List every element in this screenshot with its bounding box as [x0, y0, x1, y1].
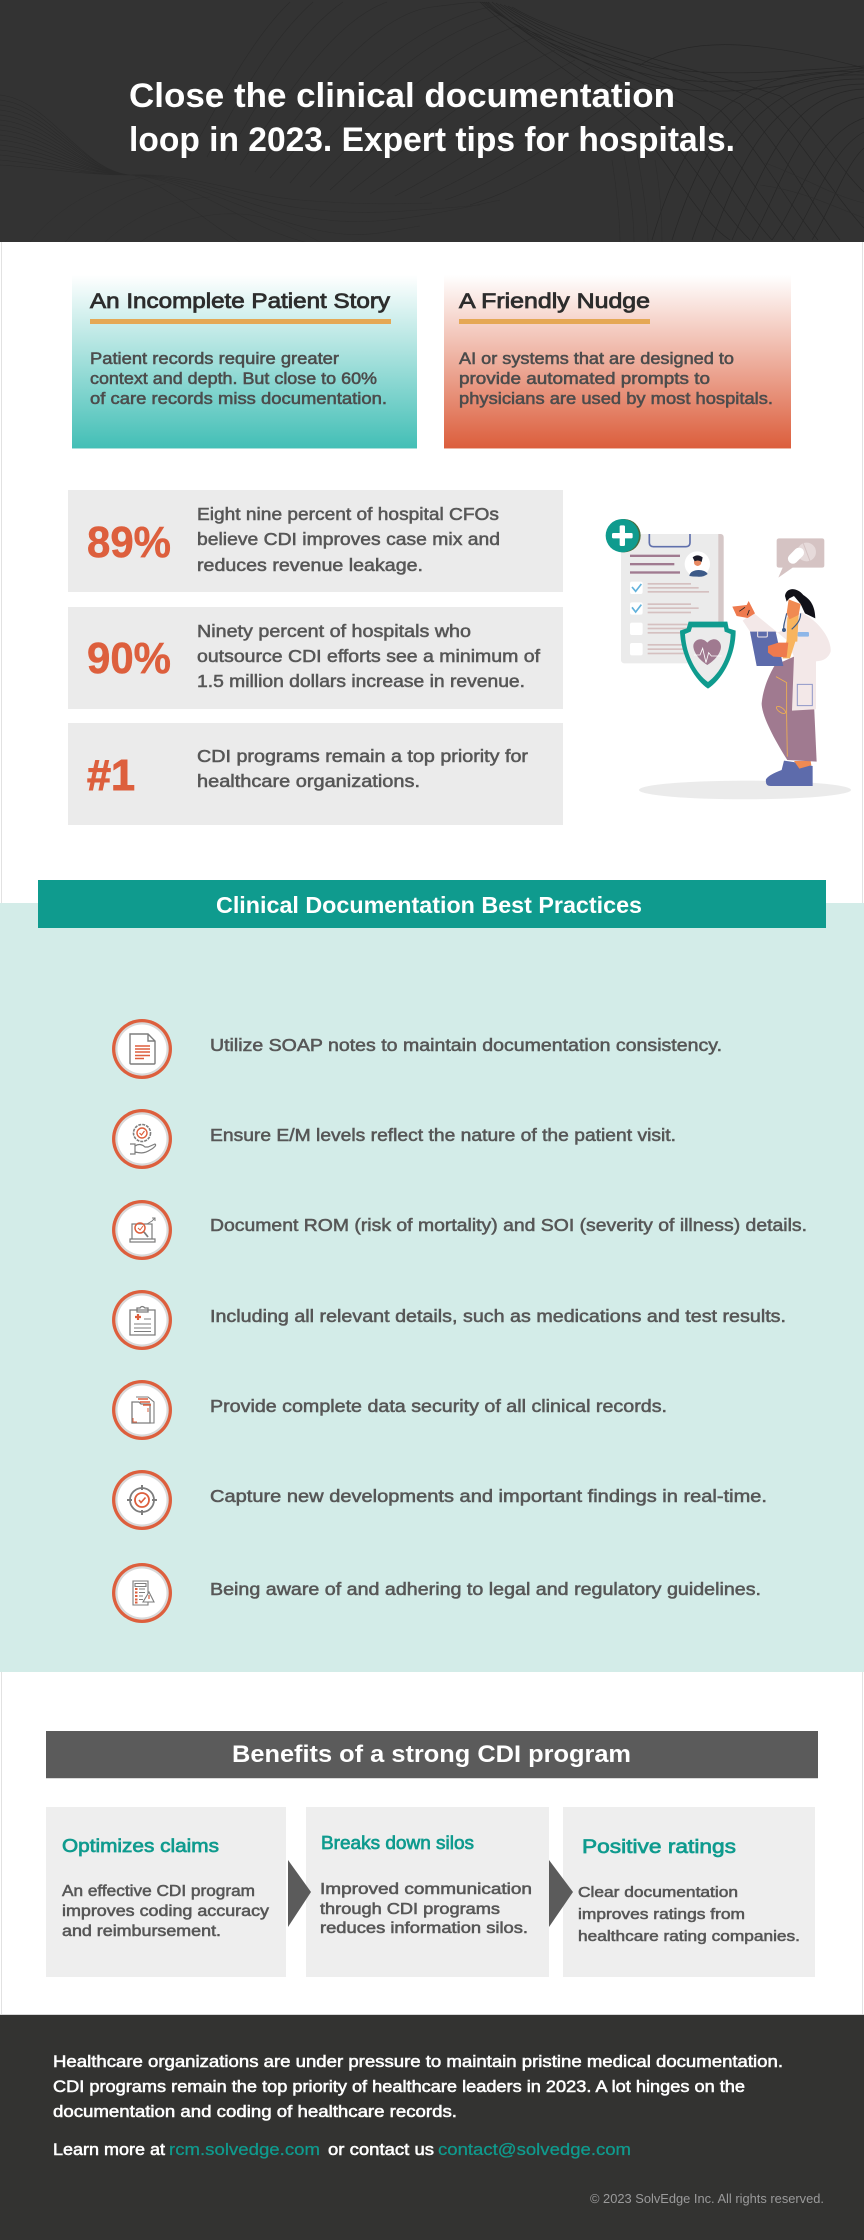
text: reduces information silos.	[320, 1920, 528, 1937]
stat text: healthcare organizations.	[197, 771, 420, 791]
footer paragraph: documentation and coding of healthcare records.	[53, 2103, 457, 2121]
heading: Breaks down silos	[321, 1832, 474, 1853]
stat text: 1.5 million dollars increase in revenue.	[197, 671, 525, 691]
figure: doctor	[732, 589, 831, 786]
hands	[768, 643, 788, 657]
text: Improved communication	[320, 1881, 532, 1898]
shoes	[766, 761, 813, 786]
icon: hand with badge	[112, 1109, 172, 1169]
practice 7: legal guidelines	[112, 1563, 761, 1623]
panel: an incomplete patient story	[72, 275, 417, 449]
title: loop in 2023. Expert tips for hospitals.	[129, 121, 735, 159]
icon: heart shield	[680, 622, 736, 689]
heading bar: benefits of a strong cdi program	[46, 1731, 818, 1779]
illustration: doctor with clipboard and shield	[606, 519, 851, 799]
contact line: rcm.solvedge.com	[169, 2140, 320, 2159]
stat card: #1	[68, 723, 563, 825]
text: patient records: of care records miss documentation.	[90, 390, 387, 408]
contact line	[53, 2140, 631, 2159]
heading bar: clinical documentation best practices: Clinical Documentation Best Practices	[216, 892, 642, 918]
contact line: Learn more at	[53, 2140, 165, 2159]
text: Clear documentation	[578, 1885, 738, 1901]
stethoscope	[784, 613, 801, 631]
text: improves coding accuracy	[62, 1903, 269, 1920]
benefit card: breaks down silos	[306, 1807, 549, 1977]
benefit card: positive ratings	[563, 1807, 815, 1977]
heading: an incomplete patient story: An Incomplete Patient Story	[90, 289, 390, 313]
stat text: Eight nine percent of hospital CFOs	[197, 504, 499, 524]
stat text: reduces revenue leakage.	[197, 555, 423, 575]
text: ai or systems: AI or systems that are designed to	[459, 350, 734, 368]
text: Utilize SOAP notes to maintain documentation consistency.	[210, 1035, 722, 1055]
practice 2: e/m levels	[112, 1109, 676, 1169]
icon: plus badge	[606, 519, 641, 552]
stat number 89%: 89%	[87, 518, 171, 567]
heading bar: clinical documentation best practices	[38, 880, 826, 928]
text: Ensure E/M levels reflect the nature of the patient visit.	[210, 1125, 676, 1145]
stat number #1: #1	[87, 751, 135, 800]
text: and reimbursement.	[62, 1923, 221, 1940]
stat card: 90%	[68, 607, 563, 709]
text: healthcare rating companies.	[578, 1929, 800, 1945]
text: patient records: Patient records require greater	[90, 350, 340, 368]
contact line: or contact us	[328, 2140, 434, 2159]
stat text: outsource CDI efforts see a minimum of	[197, 646, 540, 666]
clipboard	[750, 632, 783, 666]
neck and face	[787, 599, 801, 619]
stat card: 89%	[68, 490, 563, 592]
stat text: Ninety percent of hospitals who	[197, 621, 471, 641]
icon: checklist warning	[112, 1563, 172, 1623]
arrow 1	[288, 1860, 311, 1927]
footer paragraph	[53, 2053, 783, 2121]
text: through CDI programs	[320, 1901, 500, 1918]
practice 5: data security	[112, 1380, 667, 1440]
header banner	[0, 0, 864, 246]
stat text: believe CDI improves case mix and	[197, 529, 500, 549]
title: Close the clinical documentation	[129, 77, 675, 115]
footer	[0, 2014, 864, 2240]
text: improves ratings from	[578, 1907, 745, 1923]
text: Document ROM (risk of mortality) and SOI (severity of illness) details.	[210, 1215, 807, 1235]
hair	[785, 589, 815, 618]
text	[62, 1883, 269, 1940]
practice 1: soap notes	[112, 1019, 722, 1079]
footer paragraph: CDI programs remain the top priority of healthcare leaders in 2023. A lot hinges on the	[53, 2078, 745, 2096]
medical record sheet	[621, 534, 724, 663]
text	[320, 1881, 532, 1937]
icon: folder files	[112, 1380, 172, 1440]
text: An effective CDI program	[62, 1883, 255, 1900]
benefit card: optimizes claims	[46, 1807, 286, 1977]
stat text	[197, 504, 500, 575]
stat number 90%: 90%	[87, 634, 171, 683]
text: Including all relevant details, such as medications and test results.	[210, 1306, 786, 1326]
text: Capture new developments and important findings in real-time.	[210, 1486, 767, 1506]
icon: laptop with magnifier	[112, 1200, 172, 1260]
footer paragraph: Healthcare organizations are under pressure to maintain pristine medical documentation.	[53, 2053, 783, 2071]
text: Provide complete data security of all clinical records.	[210, 1396, 667, 1416]
coat	[743, 613, 831, 711]
practice 3: rom and soi	[112, 1200, 807, 1260]
panel: a friendly nudge	[444, 275, 791, 449]
icon: target check	[112, 1470, 172, 1530]
stat text: CDI programs remain a top priority for	[197, 746, 528, 766]
icon: speech bubble with pills	[777, 538, 824, 578]
arrow 2	[549, 1860, 573, 1927]
stat text	[197, 621, 540, 691]
icon: document	[112, 1019, 172, 1079]
text: ai or systems: provide automated prompts to	[459, 370, 710, 388]
practice 4: relevant details	[112, 1290, 786, 1350]
icon: medical clipboard	[112, 1290, 172, 1350]
text	[578, 1885, 800, 1945]
shirt	[783, 615, 799, 658]
text: Being aware of and adhering to legal and regulatory guidelines.	[210, 1579, 761, 1599]
copyright: © 2023 SolvEdge Inc. All rights reserved.	[590, 2192, 824, 2206]
section background: best practices	[0, 903, 864, 1672]
text: ai or systems	[459, 350, 773, 408]
text: patient records	[90, 350, 387, 408]
heading: a friendly nudge: A Friendly Nudge	[459, 289, 650, 313]
trousers	[762, 657, 817, 762]
heading: Positive ratings	[582, 1836, 736, 1858]
heading: Optimizes claims	[62, 1835, 219, 1856]
text: ai or systems: physicians are used by most hospitals.	[459, 390, 773, 408]
heading bar: benefits of a strong cdi program: Benefits of a strong CDI program	[232, 1741, 631, 1768]
practice 6: real-time findings	[112, 1470, 767, 1530]
title	[129, 77, 735, 159]
stat text	[197, 746, 528, 791]
contact line: contact@solvedge.com	[438, 2140, 631, 2159]
text: patient records: context and depth. But close to 60%	[90, 370, 377, 388]
